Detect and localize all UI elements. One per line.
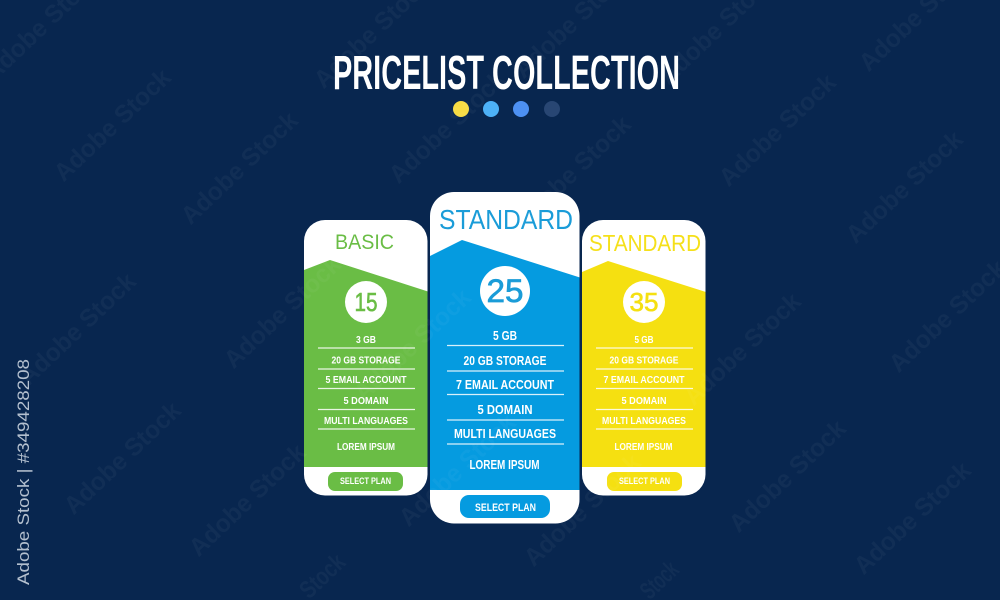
basic price badge: 15: [354, 287, 378, 317]
centre price badge: [480, 266, 530, 316]
centre price badge: 25: [486, 273, 524, 309]
basic feature list: 20 GB STORAGE: [332, 356, 401, 366]
stock watermarks: Adobe Stock: [840, 125, 969, 249]
centre heading: STANDARD: [439, 204, 573, 235]
basic feature list: [318, 335, 415, 453]
stock watermarks: Adobe Stock: [48, 63, 177, 187]
right feature list: 20 GB STORAGE: [610, 356, 679, 366]
stock watermarks: Adobe Stock: [723, 414, 852, 538]
stock id label: Adobe Stock | #349428208: [15, 359, 33, 585]
panel: standard plan, right: [582, 220, 706, 496]
stock watermarks: Adobe Stock: [713, 68, 842, 192]
stock watermarks: Adobe Stock: [393, 408, 522, 532]
stock watermarks: Adobe Stock: [13, 267, 142, 391]
title: PRICELIST COLLECTION: [333, 47, 680, 100]
panel: basic plan: [304, 220, 428, 496]
right select button: SELECT PLAN: [619, 476, 670, 486]
centre feature list: 20 GB STORAGE: [464, 354, 546, 368]
stock watermarks: Adobe Stock: [58, 396, 187, 520]
basic green band: [304, 260, 428, 467]
basic card background: [304, 220, 428, 496]
centre feature list: 5 DOMAIN: [478, 403, 532, 417]
centre select button: SELECT PLAN: [475, 502, 536, 514]
stock watermarks: Adobe Stock: [348, 283, 477, 407]
basic price badge: [345, 281, 387, 323]
right heading: STANDARD: [589, 230, 701, 256]
centre card background: [430, 192, 580, 524]
basic select button: SELECT PLAN: [340, 476, 391, 486]
basic heading: BASIC: [335, 231, 394, 254]
right card background: [582, 220, 706, 496]
centre blue band: [430, 240, 580, 490]
right feature list: LOREM IPSUM: [614, 442, 672, 453]
stock watermarks: Adobe Stock: [183, 438, 312, 562]
pagination dots: [453, 101, 560, 117]
centre feature list: 7 EMAIL ACCOUNT: [456, 378, 554, 392]
basic select button: [328, 472, 403, 491]
right feature list: MULTI LANGUAGES: [602, 416, 686, 427]
centre select button: [460, 495, 550, 518]
right feature list: 5 DOMAIN: [622, 396, 666, 407]
right feature list: [596, 335, 693, 453]
stock watermarks: Adobe Stock: [508, 110, 637, 234]
centre feature list: 5 GB: [493, 329, 517, 343]
stock watermarks: Adobe Stock: [175, 106, 304, 230]
stock watermarks: Adobe Stock: [848, 456, 977, 580]
basic feature list: MULTI LANGUAGES: [324, 416, 408, 427]
right feature list: 5 GB: [634, 335, 654, 346]
panel: standard plan, centre: [430, 192, 580, 524]
stock watermarks: Adobe Stock: [518, 448, 647, 572]
centre feature list: MULTI LANGUAGES: [454, 427, 556, 441]
stock watermarks: Adobe Stock: [383, 65, 512, 189]
stock watermarks: Adobe Stock: [218, 250, 347, 374]
basic feature list: 5 DOMAIN: [344, 396, 388, 407]
basic feature list: 3 GB: [356, 335, 376, 346]
right select button: [607, 472, 682, 491]
right feature list: 7 EMAIL ACCOUNT: [604, 375, 684, 386]
centre feature list: LOREM IPSUM: [470, 458, 540, 472]
stock watermarks: Adobe Stock: [678, 287, 807, 411]
basic feature list: 5 EMAIL ACCOUNT: [326, 375, 406, 386]
right price badge: 35: [630, 287, 658, 317]
centre feature list: [447, 329, 564, 472]
basic feature list: LOREM IPSUM: [337, 442, 395, 453]
right price badge: [623, 281, 665, 323]
right yellow band: [582, 261, 706, 467]
